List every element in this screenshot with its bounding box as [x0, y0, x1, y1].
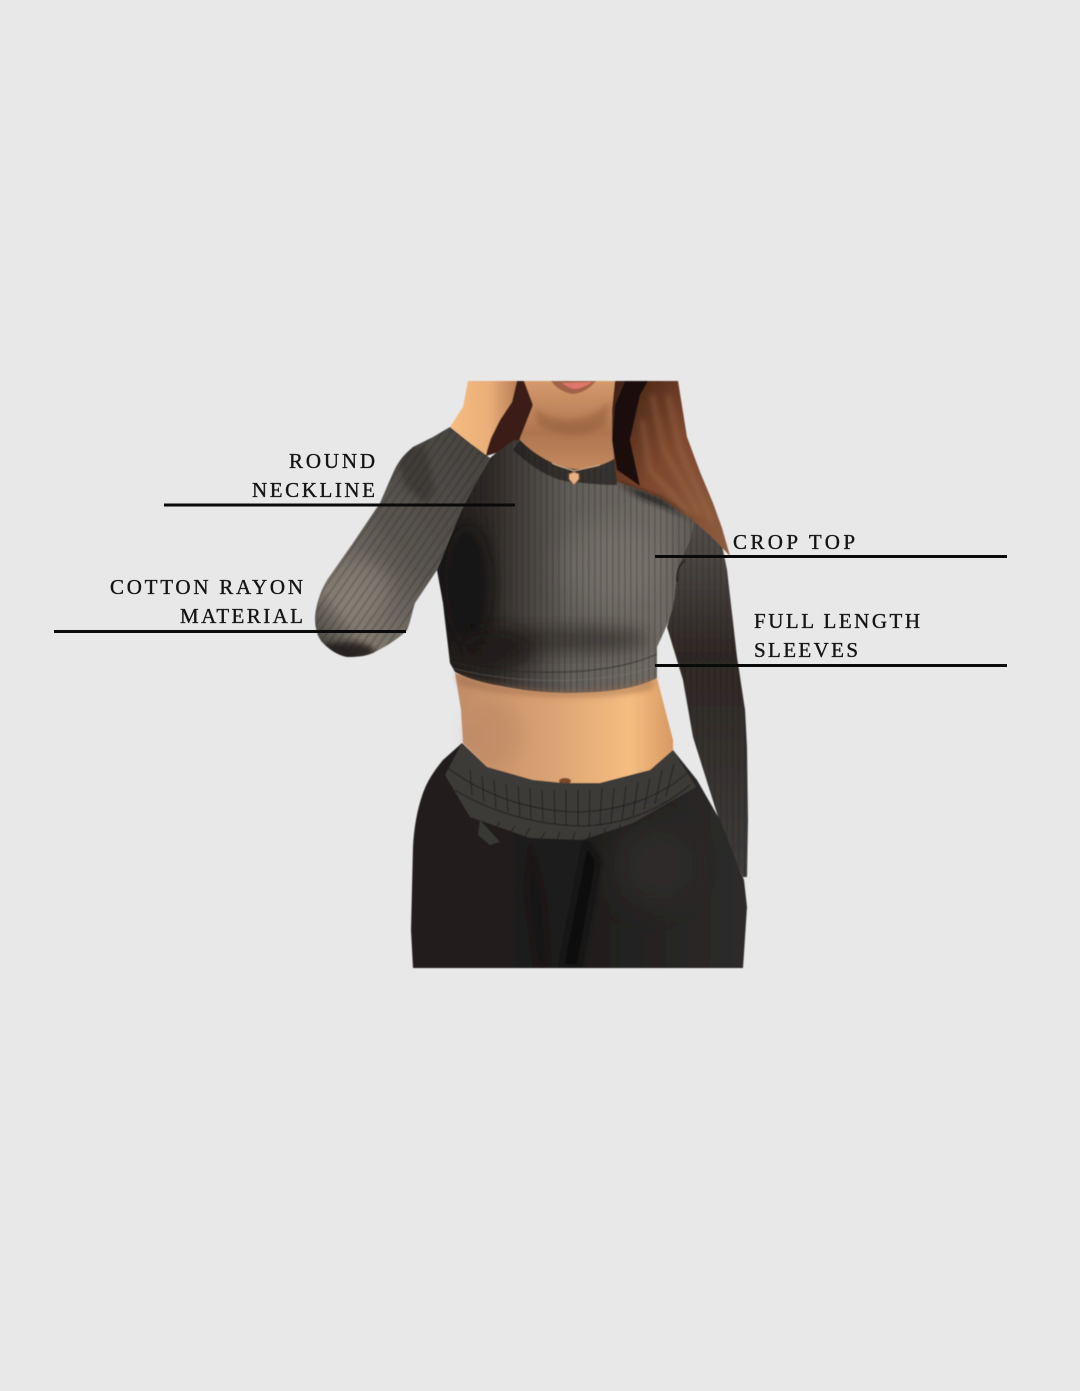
- necklace: [552, 463, 600, 485]
- hair on right: [612, 381, 730, 556]
- callout: full length sleeves: FULL LENGTH: [754, 609, 920, 633]
- left arm sleeve: [314, 426, 490, 658]
- callout: round neckline: [164, 449, 515, 506]
- lips: [551, 381, 596, 394]
- model photo illustration: [300, 381, 748, 968]
- callout: crop top: CROP TOP: [733, 530, 855, 554]
- waistband: [445, 743, 696, 840]
- callout: full length sleeves: SLEEVES: [754, 638, 858, 662]
- callout: cotton rayon material: MATERIAL: [180, 604, 303, 628]
- sweatpants: [411, 743, 747, 968]
- callout: full length sleeves: [655, 609, 1007, 667]
- right arm sleeve: [667, 505, 748, 877]
- callout: round neckline: ROUND: [289, 449, 375, 473]
- callout: cotton rayon material: COTTON RAYON: [110, 575, 303, 599]
- bare midriff: [455, 673, 673, 784]
- crop top body: [430, 436, 710, 696]
- callout: crop top: [655, 530, 1007, 558]
- callout: cotton rayon material: [54, 575, 406, 633]
- callout: round neckline: NECKLINE: [252, 478, 375, 502]
- hand raised to hair: [450, 381, 517, 457]
- face and neck: [515, 381, 625, 485]
- hair behind neck on left: [486, 381, 533, 456]
